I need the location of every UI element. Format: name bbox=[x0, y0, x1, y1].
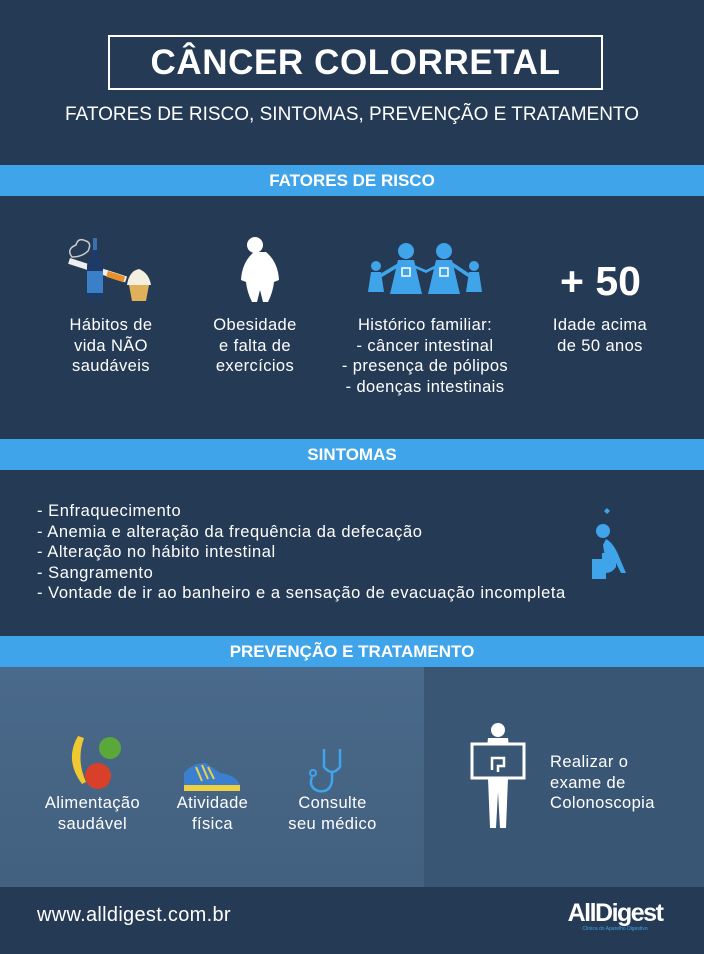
label: age: Idade acima bbox=[553, 316, 647, 334]
icon: fruits bbox=[72, 736, 121, 789]
label: doctor bbox=[288, 794, 377, 832]
label: obesity bbox=[213, 316, 297, 375]
icon: person with screen bbox=[470, 723, 526, 828]
label: family history: - presença de pólipos bbox=[342, 357, 508, 375]
symptoms list: - Enfraquecimento bbox=[37, 502, 181, 520]
icon: stethoscope bbox=[309, 749, 342, 792]
title bbox=[108, 35, 603, 90]
symptoms list: - Vontade de ir ao banheiro e a sensação de evacuação incompleta bbox=[37, 584, 566, 602]
label: colonoscopy: exame de bbox=[550, 774, 626, 792]
label: family history bbox=[342, 316, 508, 396]
label: food bbox=[45, 794, 140, 832]
label: obesity: Obesidade bbox=[213, 316, 297, 334]
band: fatores de risco bbox=[0, 165, 704, 196]
label: age bbox=[553, 316, 647, 354]
subtitle: FATORES DE RISCO, SINTOMAS, PREVENÇÃO E TRATAMENTO bbox=[65, 104, 639, 125]
icon: family bbox=[368, 243, 482, 294]
label: activity: física bbox=[192, 814, 233, 832]
logo: AllDigest bbox=[568, 899, 662, 927]
icon: unhealthy habits bbox=[68, 238, 151, 301]
band: sintomas: SINTOMAS bbox=[307, 445, 397, 464]
icon: obesity bbox=[241, 237, 279, 302]
icon: person on toilet bbox=[592, 508, 626, 579]
logo: Clínica do Aparelho Digestivo bbox=[582, 926, 648, 932]
symptoms list: - Sangramento bbox=[37, 564, 153, 582]
title: CÂNCER COLORRETAL bbox=[150, 43, 561, 82]
footer url: www.alldigest.com.br bbox=[37, 904, 231, 926]
label: doctor: Consulte bbox=[298, 794, 367, 812]
label: colonoscopy: Realizar o bbox=[550, 753, 628, 771]
band: prevenção bbox=[0, 636, 704, 667]
label: activity bbox=[176, 794, 248, 832]
label: obesity: e falta de bbox=[219, 336, 291, 354]
panel: prevention left bbox=[0, 667, 424, 887]
label: doctor: seu médico bbox=[288, 814, 377, 832]
band: prevenção: PREVENÇÃO E TRATAMENTO bbox=[230, 642, 474, 661]
label: activity: Atividade bbox=[177, 794, 248, 812]
label: family history: - doenças intestinais bbox=[346, 378, 504, 396]
stat: +50: + 50 bbox=[560, 258, 641, 304]
band: sintomas bbox=[0, 439, 704, 470]
label: habits: vida NÃO bbox=[74, 336, 148, 354]
symptoms list: - Alteração no hábito intestinal bbox=[37, 543, 276, 561]
label: habits bbox=[70, 316, 152, 375]
label: colonoscopy bbox=[550, 753, 655, 812]
label: family history: Histórico familiar: bbox=[358, 316, 492, 334]
icon: sneaker bbox=[184, 763, 240, 791]
symptoms list: - Anemia e alteração da frequência da defecação bbox=[37, 522, 422, 540]
label: food: Alimentação bbox=[45, 794, 140, 812]
label: age: de 50 anos bbox=[557, 336, 643, 354]
band: fatores de risco: FATORES DE RISCO bbox=[269, 171, 435, 190]
label: habits: Hábitos de bbox=[70, 316, 152, 334]
label: colonoscopy: Colonoscopia bbox=[550, 794, 655, 812]
panel: treatment right bbox=[424, 667, 704, 887]
label: food: saudável bbox=[58, 814, 127, 832]
symptoms list bbox=[37, 502, 566, 602]
label: obesity: exercícios bbox=[216, 357, 294, 375]
label: habits: saudáveis bbox=[72, 357, 150, 375]
label: family history: - câncer intestinal bbox=[357, 336, 493, 354]
